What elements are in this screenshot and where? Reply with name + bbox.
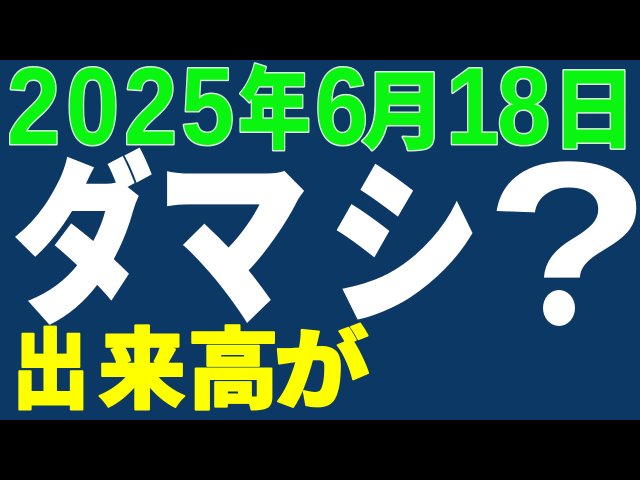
title: date: 1 [446,45,499,167]
title: date: 月 [361,66,446,161]
title: date: 2 [124,45,177,167]
subtitle: 出 [12,321,89,420]
title: date: 年 [238,61,311,161]
title: date: 5 [181,45,234,167]
title: date: 8 [497,45,550,167]
main heading: マ [156,139,307,346]
title: date: 0 [66,45,119,167]
subtitle [12,321,369,421]
title: date: 6 [315,45,368,167]
main heading: シ [328,148,480,344]
main heading [14,113,640,378]
title: date: 2 [7,45,60,167]
title: date: 日 [552,62,636,160]
main heading: ダ [14,144,152,343]
background panel [0,60,640,420]
subtitle: 来 [98,321,186,420]
subtitle: 高 [187,322,279,421]
subtitle: が [274,322,369,420]
title: date [7,45,636,167]
